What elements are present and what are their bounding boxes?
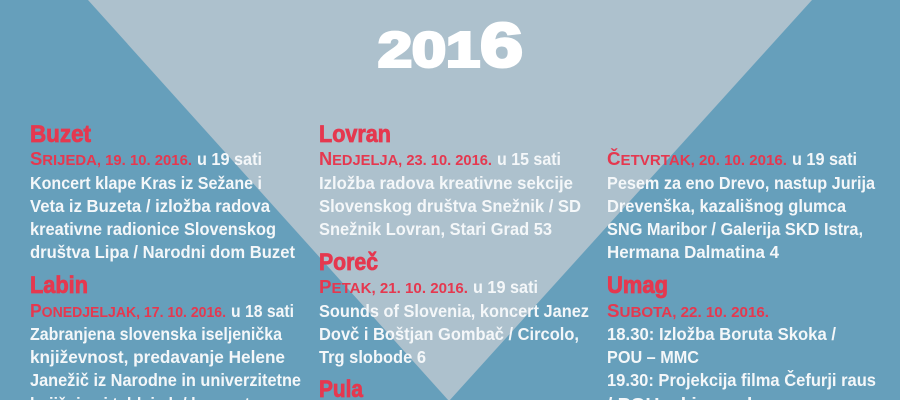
description: Buzet: kreativne radionice Slovenskog [30, 219, 276, 239]
panel: Lovran [319, 121, 581, 239]
description: Labin: Janežič iz Narodne in univerzitetne [30, 370, 301, 390]
heading: Labin: Labin [30, 272, 88, 299]
description: Buzet: Koncert klape Kras iz Sežane i [30, 173, 262, 193]
description: Četvrtak [607, 173, 875, 262]
date: Umag: SUBOTA, 22. 10. 2016. [607, 301, 769, 321]
title: year 2016: 201 6 [378, 12, 523, 80]
panel: Četvrtak event [607, 148, 875, 262]
description: Četvrtak: Pesem za eno Drevo, nastup Jurija [607, 173, 875, 193]
description: Labin: književnost, predavanje Helene [30, 347, 285, 367]
heading: Poreč: Poreč [319, 249, 378, 276]
description: Umag: 19.30: Projekcija filma Čefurji raus [607, 369, 876, 390]
description: Umag: POU – MMC [607, 347, 699, 367]
description: Poreč: Trg slobode 6 [319, 347, 426, 367]
date: Labin: PONEDJELJAK, 17. 10. 2016. [30, 301, 226, 321]
panel: Labin [30, 272, 301, 400]
description: Poreč: Sounds of Slovenia, koncert Janez [319, 301, 589, 321]
description: Lovran: Izložba radova kreativne sekcije [319, 173, 573, 193]
description: Četvrtak: Drevenška, kazališnog glumca [607, 196, 846, 216]
heading: Lovran: Lovran [319, 121, 391, 148]
description: Četvrtak: SNG Maribor / Galerija SKD Istra, [607, 219, 863, 239]
description: Poreč [319, 301, 589, 367]
date: Lovran: NEDJELJA, 23. 10. 2016. [319, 149, 492, 169]
description: Poreč: Dovč i Boštjan Gombač / Circolo, [319, 324, 579, 344]
panel: Buzet [30, 121, 295, 262]
date: Poreč: PETAK, 21. 10. 2016. [319, 277, 468, 297]
description: Buzet [30, 173, 295, 262]
description: Lovran [319, 173, 581, 239]
time: Lovran: u 15 sati [497, 149, 561, 169]
time: Poreč: u 19 sati [473, 277, 538, 297]
time: Buzet: u 19 sati [197, 149, 262, 169]
panel: Poreč [319, 249, 589, 367]
description: Buzet: Veta iz Buzeta / izložba radova [30, 196, 270, 216]
time: Labin: u 18 sati [231, 301, 294, 321]
time: Četvrtak: u 19 sati [792, 149, 857, 169]
description: Labin: Zabranjena slovenska iseljenička [30, 324, 282, 344]
heading: Umag: Umag [607, 272, 668, 299]
description: Umag: 18.30: Izložba Boruta Skoka / [607, 324, 836, 344]
description: Labin [30, 324, 301, 400]
date: Buzet: SRIJEDA, 19. 10. 2016. [30, 149, 192, 169]
description: Lovran: Snežnik Lovran, Stari Grad 53 [319, 219, 552, 239]
heading: Buzet: Buzet [30, 121, 91, 148]
panel: Umag [607, 272, 876, 400]
description: Četvrtak: Hermana Dalmatina 4 [607, 242, 779, 262]
description: Umag [607, 324, 876, 400]
description: Buzet: društva Lipa / Narodni dom Buzet [30, 242, 295, 262]
date: Četvrtak: ČETVRTAK, 20. 10. 2016. [607, 148, 787, 169]
description: Lovran: Slovenskog društva Snežnik / SD [319, 196, 581, 216]
